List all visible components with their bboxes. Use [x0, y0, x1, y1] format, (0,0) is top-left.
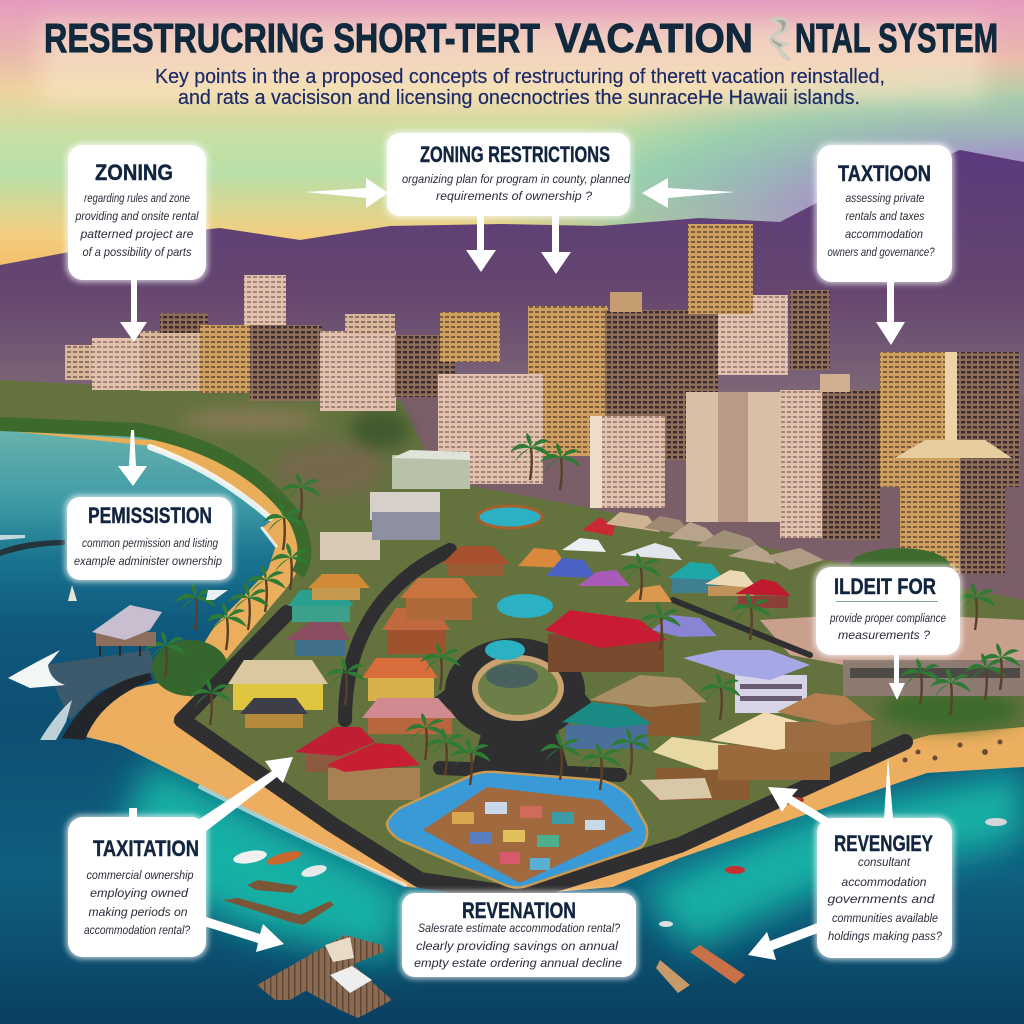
arrow: from zoning: [120, 280, 147, 342]
panel: zoning: regarding rules and zone: [84, 191, 190, 205]
title: RESESTRUCRING SHORT-TERT: [44, 15, 540, 61]
arrow: revengiey to resort: [768, 787, 828, 825]
panel: permission: example administer ownership: [74, 554, 222, 568]
skyline buildings: [65, 224, 1020, 574]
panel: zoning: [66, 143, 208, 282]
hazy city ground behind towers: [300, 395, 1024, 610]
title swirl ornament: [770, 18, 790, 60]
panel: permission: common permission and listing: [82, 536, 218, 550]
panel: permission: [65, 495, 234, 582]
shallow water glow right: [640, 768, 1024, 950]
arrow: right into zoning restrictions: [642, 178, 735, 208]
panel: revengiey: REVENGIEY: [834, 831, 933, 856]
hedge behind ildeit panel: [850, 548, 950, 584]
title band glow: [40, 22, 985, 102]
panel: taxitation: [66, 815, 208, 959]
panel: revengiey: holdings making pass?: [828, 929, 942, 943]
arrows: [118, 178, 905, 960]
inland clearings: [180, 410, 1020, 730]
panel: taxitation: accommodation rental?: [84, 923, 190, 937]
panel: revengiey: [815, 816, 954, 960]
panel: zoning restrictions: ZONING RESTRICTIONS: [420, 142, 610, 167]
connector above revengiey: [884, 757, 893, 818]
panel: revengiey: accommodation: [842, 875, 927, 889]
panel: taxitation: employing owned: [90, 886, 188, 900]
panel: ildeit for: measurements ?: [838, 628, 930, 642]
panel: zoning: patterned project are: [79, 227, 194, 241]
arrow: from ildeit: [889, 655, 905, 700]
small pools: [478, 506, 553, 660]
panel: zoning restrictions: requirements of ownership ?: [436, 189, 592, 203]
panel: taxtion: accommodation: [845, 227, 923, 241]
panel: taxtion: rentals and taxes: [846, 209, 924, 223]
arrow: revengiey to water: [748, 922, 823, 960]
panel: ildeit for: provide proper compliance: [829, 611, 946, 625]
panel: zoning: providing and onsite rental: [75, 209, 199, 223]
panel: taxtion: assessing private: [846, 191, 925, 205]
connector above taxitation: [129, 808, 137, 818]
panel: revenation: Salesrate estimate accommodation rental?: [418, 921, 620, 935]
arrow: taxitation to dock: [204, 917, 284, 952]
arrow: restrictions down one: [466, 216, 496, 272]
low-rise buildings: [320, 450, 470, 560]
panel: zoning restrictions: [385, 131, 632, 218]
panel: zoning: of a possibility of parts: [82, 245, 192, 259]
shallow water glow left: [110, 760, 410, 960]
far-side hotel complex: [760, 613, 1024, 696]
coastal tree strip: [0, 424, 304, 574]
panel: ildeit for: ILDEIT FOR: [834, 574, 936, 599]
arrow: taxitation to resort: [198, 757, 293, 832]
subtitle: Key points in the a proposed concepts of restructuring of therett vacation reinstalled,: [155, 66, 885, 88]
title: [44, 15, 998, 61]
arrow: down to permission: [118, 430, 147, 486]
resort houses: [228, 512, 875, 800]
sailboats: [68, 585, 228, 601]
sandy beach: [0, 430, 1024, 895]
panel: taxtion: owners and governance?: [828, 245, 935, 259]
title: VACATION: [555, 15, 753, 61]
beachgoers: [902, 740, 1002, 762]
panel: zoning: ZONING: [95, 160, 173, 185]
panel: revenation: clearly providing savings on annual: [416, 939, 618, 953]
ocean waves and reef: [0, 535, 155, 740]
panel: taxtion: TAXTIOON: [838, 161, 931, 186]
panel: ildeit for: [814, 565, 962, 657]
arrow: left into zoning restrictions: [305, 178, 388, 208]
panel: revenation: [400, 891, 638, 979]
resort roads: [182, 550, 905, 895]
panel: taxtion: [815, 143, 954, 284]
docks and boats, lower right: [656, 797, 1007, 993]
panel: revenation: REVENATION: [462, 898, 576, 923]
docks and boats, lower left: [223, 848, 392, 1018]
panel: zoning restrictions: organizing plan for program in county, planned: [402, 172, 630, 186]
subtitle: [155, 66, 885, 109]
large resort pool: [387, 772, 647, 888]
subtitle: and rats a vacisison and licensing onecnoctries the sunraceHe Hawaii islands.: [178, 87, 860, 109]
surf foam: [150, 447, 405, 885]
road to pool: [470, 720, 570, 775]
panel: revenation: empty estate ordering annual decline: [414, 956, 622, 970]
panel: taxitation: TAXITATION: [93, 836, 199, 861]
overwater bungalow: [92, 605, 162, 656]
sky background: [0, 0, 1024, 300]
mountains: [0, 150, 1024, 620]
arrow: restrictions down two: [541, 216, 571, 274]
ocean: [0, 425, 1024, 1024]
panel: revengiey: consultant: [858, 855, 911, 869]
green clump by the bungalow: [152, 640, 228, 696]
arrow: from taxtion: [876, 282, 905, 345]
panel: revengiey: governments and: [828, 892, 935, 906]
roundabout: [445, 638, 585, 742]
panel: taxitation: making periods on: [88, 905, 188, 919]
coastal green land: [0, 380, 1024, 890]
palm trees: [145, 433, 1021, 790]
panel: permission: PEMISSISTION: [88, 503, 212, 528]
panel: taxitation: commercial ownership: [86, 868, 194, 882]
panel: revengiey: communities available: [832, 911, 938, 925]
